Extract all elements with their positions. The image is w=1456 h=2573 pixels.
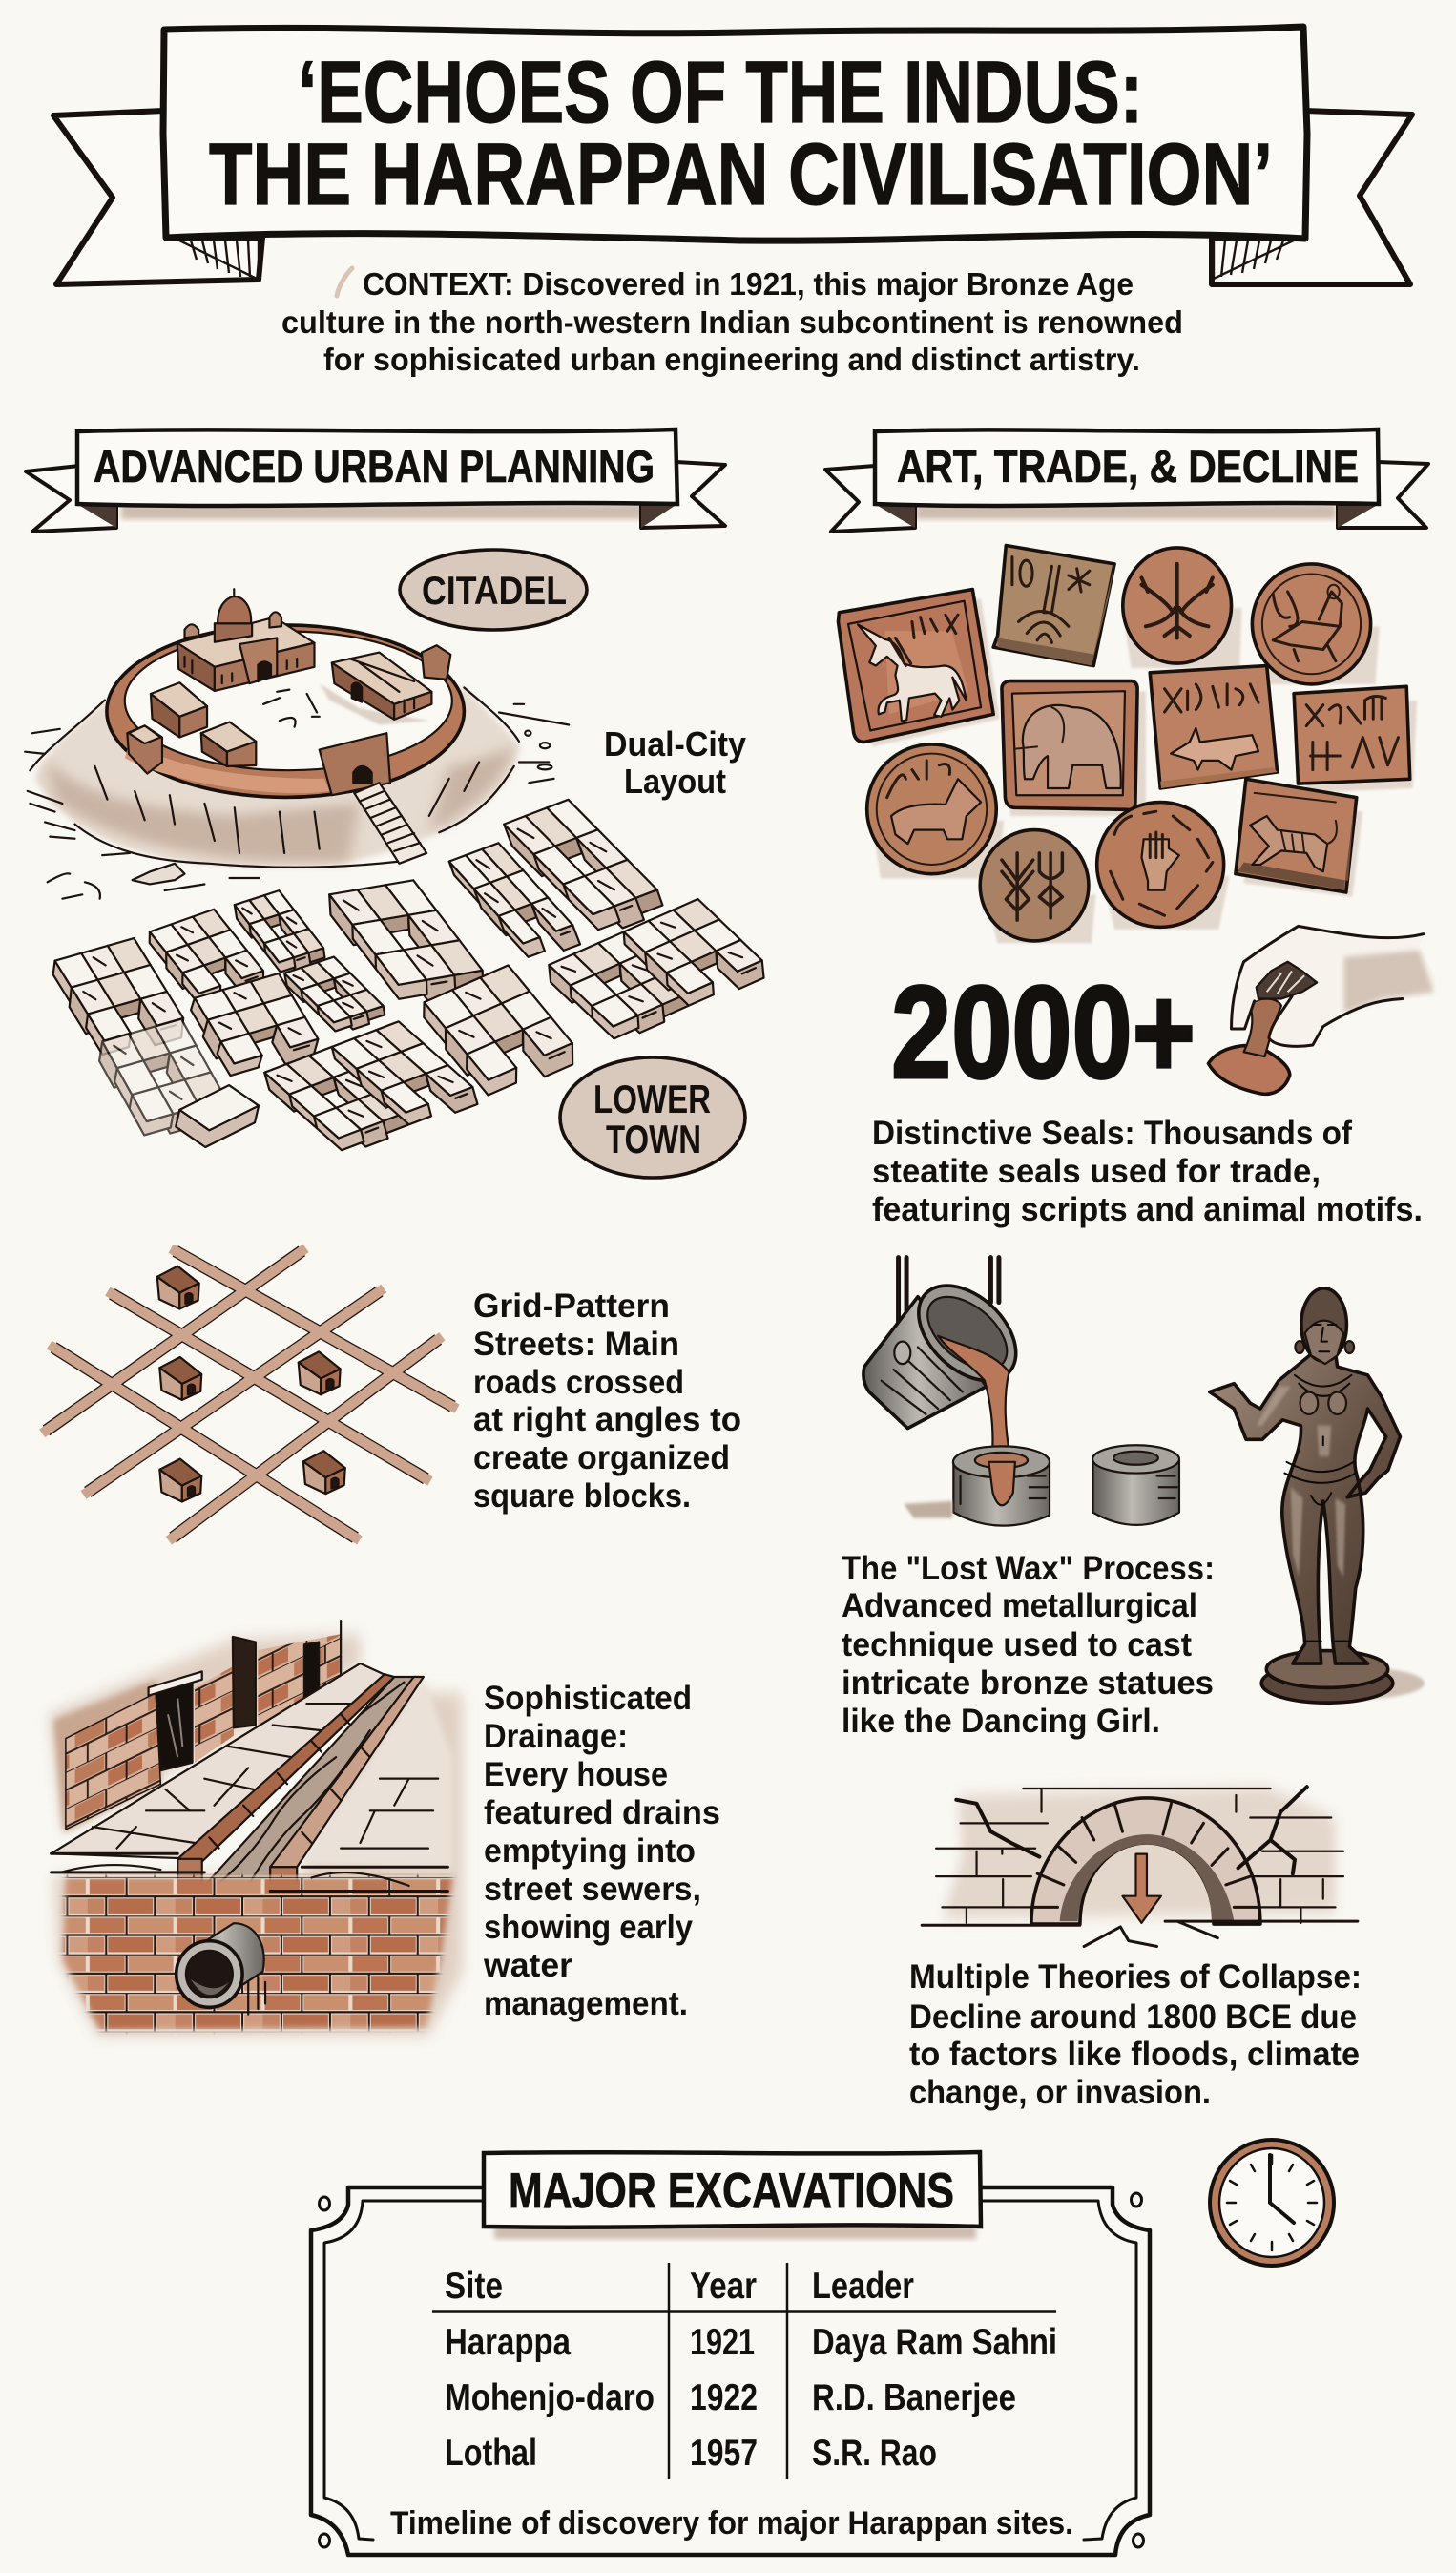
table: year column: 1957: [690, 2433, 758, 2474]
text: sophisticated drainage: water: [483, 1947, 572, 1984]
table: year column: Year: [690, 2266, 757, 2307]
label: citadel: [400, 550, 587, 630]
statue base: [1261, 1651, 1425, 1703]
house wall: [53, 1621, 341, 1832]
banner panel: [875, 429, 1379, 506]
context text: [281, 266, 1183, 377]
icon: pen stroke: [337, 268, 352, 296]
seal: round glyph: [1123, 548, 1232, 663]
text: grid-pattern streets: Grid-Pattern: [473, 1287, 670, 1325]
banner left tail: [53, 111, 262, 284]
table caption: Timeline of discovery for major Harappan sites.: [390, 2505, 1073, 2542]
mound: [25, 687, 569, 899]
banner tails: [825, 462, 1428, 532]
title text: ‘ECHOES OF THE INDUS:: [298, 44, 1143, 141]
table: leader column: Leader: [812, 2266, 914, 2307]
text: distinctive seals: steatite seals used for trade,: [872, 1153, 1321, 1190]
label: lower town: [560, 1057, 745, 1178]
text: sophisticated drainage: showing early: [484, 1909, 693, 1946]
text: multiple theories of collapse: to factors like floods, climate: [909, 2036, 1360, 2073]
seal: unicorn: [838, 590, 993, 743]
heading text: MAJOR EXCAVATIONS: [509, 2164, 954, 2219]
ladle: [863, 1266, 1027, 1429]
label: dual-city layout: [604, 724, 746, 801]
drain pipe: [177, 1923, 265, 2015]
citadel staircase: [354, 783, 426, 864]
house icons: [157, 1266, 345, 1502]
text: grid-pattern streets: [473, 1287, 741, 1515]
table: leader column: [812, 2266, 1057, 2474]
text: lost wax process: like the Dancing Girl.: [842, 1703, 1160, 1740]
fold shading: [878, 506, 1376, 528]
table: leader column: S.R. Rao: [812, 2433, 937, 2474]
mould: filled: [904, 1446, 1050, 1526]
banner shadow: [916, 504, 1336, 519]
text: sophisticated drainage: featured drains: [484, 1794, 720, 1831]
text: lost wax process: technique used to cast: [842, 1626, 1192, 1663]
pavement: [52, 1663, 452, 1870]
text: sophisticated drainage: Drainage:: [484, 1718, 628, 1755]
illustration: collapsing arch: [922, 1787, 1358, 1946]
label: lower town: TOWN: [606, 1117, 701, 1161]
label: citadel: CITADEL: [422, 568, 567, 613]
banner tails: [26, 462, 725, 532]
seal: script and rat: [1150, 666, 1278, 788]
seal: tree symbol: [993, 546, 1114, 666]
seal: tridents: [980, 830, 1089, 941]
text: lost wax process: Advanced metallurgical: [842, 1587, 1197, 1624]
section heading: advanced urban planning: [26, 429, 725, 532]
text: lost wax process: [842, 1550, 1215, 1740]
banner panel: [77, 429, 677, 506]
banner fold hatching: [177, 239, 1296, 280]
illustration: steatite seals: [838, 546, 1436, 1094]
statue body: [1210, 1288, 1400, 1663]
context lines: CONTEXT: Discovered in 1921, this major Bronze Age: [363, 266, 1134, 302]
table: site column: Harappa: [445, 2322, 571, 2363]
heading box: [484, 2152, 981, 2228]
text: sophisticated drainage: Every house: [484, 1756, 668, 1793]
table: leader column: Daya Ram Sahni: [812, 2322, 1057, 2363]
table: year column: 1922: [690, 2377, 758, 2418]
statistic: 2000+: 2000+: [891, 959, 1196, 1106]
table: site column: Site: [445, 2266, 503, 2307]
heading shadow: [494, 2226, 976, 2239]
table rules: [432, 2263, 1056, 2479]
context lines: for sophisicated urban engineering and distinct artistry.: [323, 342, 1140, 377]
molten bronze stream: [938, 1336, 1015, 1507]
drain channel: [177, 1674, 424, 1892]
table: site column: [445, 2266, 655, 2474]
road surfaces: [46, 1251, 452, 1538]
citadel buildings: [127, 645, 450, 795]
fold shading: [80, 506, 675, 528]
road edges: [46, 1251, 452, 1538]
text: grid-pattern streets: roads crossed: [473, 1364, 684, 1401]
text: lost wax process: The "Lost Wax" Process:: [842, 1550, 1215, 1587]
heading text: ART, TRADE, & DECLINE: [897, 441, 1359, 492]
table: leader column: R.D. Banerjee: [812, 2377, 1016, 2418]
text: sophisticated drainage: management.: [484, 1985, 688, 2022]
text: distinctive seals: Distinctive Seals: Thousands of: [872, 1115, 1352, 1152]
wall bricks: [936, 1789, 1343, 1923]
text: sophisticated drainage: emptying into: [484, 1832, 696, 1870]
illustration: citadel mound and lower town: [25, 589, 775, 1155]
seal: elephant: [1002, 681, 1137, 810]
title text: [209, 44, 1273, 223]
context lines: [281, 266, 1183, 377]
text: distinctive seals: featuring scripts and animal motifs.: [872, 1191, 1423, 1228]
section heading: art, trade and decline: [825, 429, 1428, 532]
seal shadows: [847, 598, 1417, 943]
wash background: [49, 1634, 463, 2036]
arch: [1031, 1798, 1260, 1924]
text: sophisticated drainage: Sophisticated: [484, 1680, 692, 1717]
label: dual-city layout: Layout: [624, 762, 726, 801]
context lines: culture in the north-western Indian subcontinent is renowned: [281, 304, 1183, 340]
table: site column: Mohenjo-daro: [445, 2377, 655, 2418]
panel: major excavations: [311, 2152, 1150, 2555]
banner shadow: [121, 504, 646, 519]
text: multiple theories of collapse: [909, 1958, 1362, 2111]
brick wall front: [49, 1853, 463, 2040]
text: multiple theories of collapse: Multiple Theories of Collapse:: [909, 1958, 1362, 1996]
text: grid-pattern streets: square blocks.: [473, 1477, 691, 1515]
text: grid-pattern streets: Streets: Main: [473, 1326, 679, 1363]
text: multiple theories of collapse: Decline around 1800 BCE due: [909, 1998, 1357, 2036]
text: multiple theories of collapse: change, or invasion.: [909, 2074, 1211, 2111]
ornate frame: [311, 2187, 1150, 2555]
table: year column: [690, 2266, 758, 2474]
text: grid-pattern streets: create organized: [473, 1439, 730, 1476]
banner main panel: [163, 27, 1307, 241]
illustration: lost wax casting: [863, 1258, 1179, 1526]
illustration: dancing girl statue: [1210, 1288, 1425, 1703]
ladle cords: [899, 1258, 999, 1348]
seal: script square: [1294, 686, 1410, 784]
ground line: [922, 1921, 1358, 1946]
text: distinctive seals: [872, 1115, 1423, 1228]
text: lost wax process: intricate bronze statues: [842, 1664, 1214, 1702]
table: year column: 1921: [690, 2322, 755, 2363]
icon: clock: [1210, 2140, 1334, 2266]
label: lower town: LOWER: [593, 1077, 711, 1121]
text: grid-pattern streets: at right angles to: [473, 1401, 741, 1438]
banner right tail: [1212, 111, 1412, 284]
illustration: grid-pattern streets: [46, 1251, 452, 1538]
text: sophisticated drainage: [483, 1680, 720, 2022]
hand holding stamp: [1208, 926, 1436, 1094]
lower town blocks: [43, 800, 775, 1155]
seal: ox: [867, 744, 996, 874]
seal: round with figure: [1252, 564, 1371, 684]
seal: tiger: [1236, 779, 1357, 892]
illustration: drainage: [49, 1621, 463, 2040]
table: site column: Lothal: [445, 2433, 537, 2474]
mould: empty: [1092, 1445, 1179, 1525]
heading text: ADVANCED URBAN PLANNING: [94, 441, 655, 492]
text: sophisticated drainage: street sewers,: [484, 1871, 701, 1908]
title banner: [53, 27, 1412, 284]
citadel palace: [177, 589, 314, 691]
cracks: [956, 1787, 1307, 1873]
label: dual-city layout: Dual-City: [604, 724, 746, 764]
arrow: decline: [1122, 1854, 1161, 1923]
citadel wall: [107, 625, 464, 797]
seal: hand palm: [1097, 803, 1224, 927]
wall wash: [942, 1787, 1335, 1918]
